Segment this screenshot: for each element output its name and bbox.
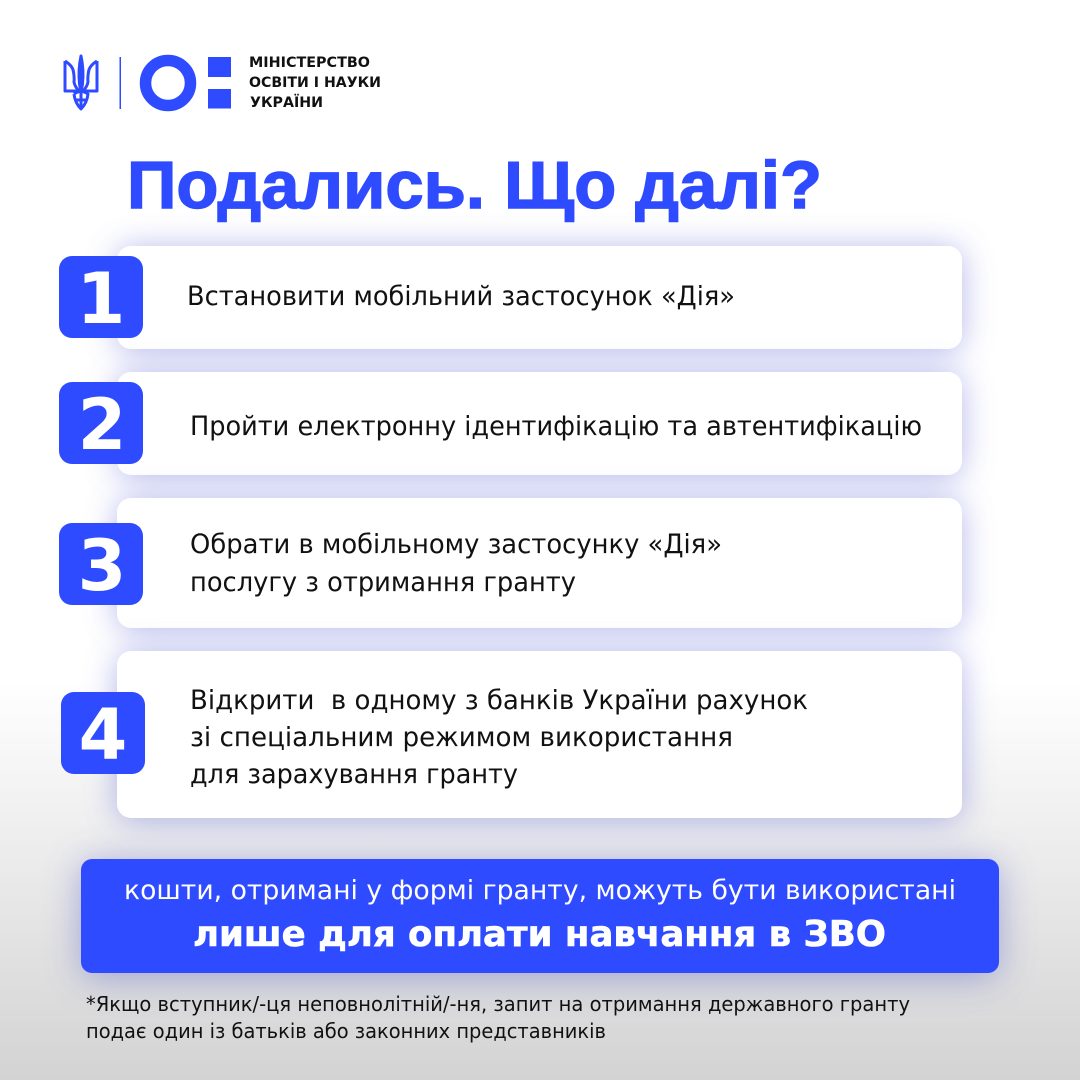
card 4: [117, 651, 962, 818]
footnote: подає один із батьків або законних представників: [86, 1019, 606, 1043]
step 1: [59, 246, 962, 349]
step 3 text: [190, 529, 722, 598]
header logo: [65, 55, 381, 111]
ministry name: МІНІСТЕРСТВО: [249, 55, 370, 71]
badge 1: [59, 256, 143, 340]
badge 1: 1: [77, 258, 125, 340]
banner text line: кошти, отримані у формі гранту, можуть бути використані: [124, 875, 956, 906]
step 4 text: Відкрити в одному з банків України рахунок: [190, 685, 808, 716]
step 4 text: для зарахування гранту: [190, 759, 518, 790]
callout banner: [81, 859, 999, 973]
badge 3: 3: [78, 525, 126, 607]
ministry name: [249, 55, 381, 111]
footnote: [86, 992, 910, 1043]
icon: ministry ring: [146, 60, 190, 106]
card 1: [117, 246, 962, 349]
icon: trident: [65, 56, 97, 109]
step 1 text: Встановити мобільний застосунок «Дія»: [187, 281, 735, 312]
step 3 text: послугу з отримання гранту: [190, 567, 576, 598]
title: Подались. Що далі?: [127, 148, 822, 223]
card 2: [117, 372, 962, 475]
step 3 text: Обрати в мобільному застосунку «Дія»: [190, 529, 722, 560]
divider: [120, 57, 121, 109]
banner bold line: лише для оплати навчання в ЗВО: [193, 914, 886, 955]
badge 3: [59, 523, 143, 607]
step 4 text: зі спеціальним режимом використання: [190, 722, 733, 753]
step 2: [59, 372, 962, 475]
footnote: *Якщо вступник/-ця неповнолітній/-ня, запит на отримання державного гранту: [86, 992, 910, 1016]
ministry name: УКРАЇНИ: [250, 94, 323, 111]
badge 2: [59, 382, 143, 466]
icon: ministry squares: [208, 57, 231, 108]
badge 4: 4: [79, 694, 127, 776]
step 4 text: [190, 685, 808, 790]
step 4: [61, 651, 962, 818]
ministry name: ОСВІТИ І НАУКИ: [249, 75, 381, 91]
step 2 text: Пройти електронну ідентифікацію та автентифікацію: [190, 411, 922, 442]
badge 4: [61, 692, 145, 776]
card 3: [117, 498, 962, 628]
badge 2: 2: [78, 384, 126, 466]
step 3: [59, 498, 962, 628]
